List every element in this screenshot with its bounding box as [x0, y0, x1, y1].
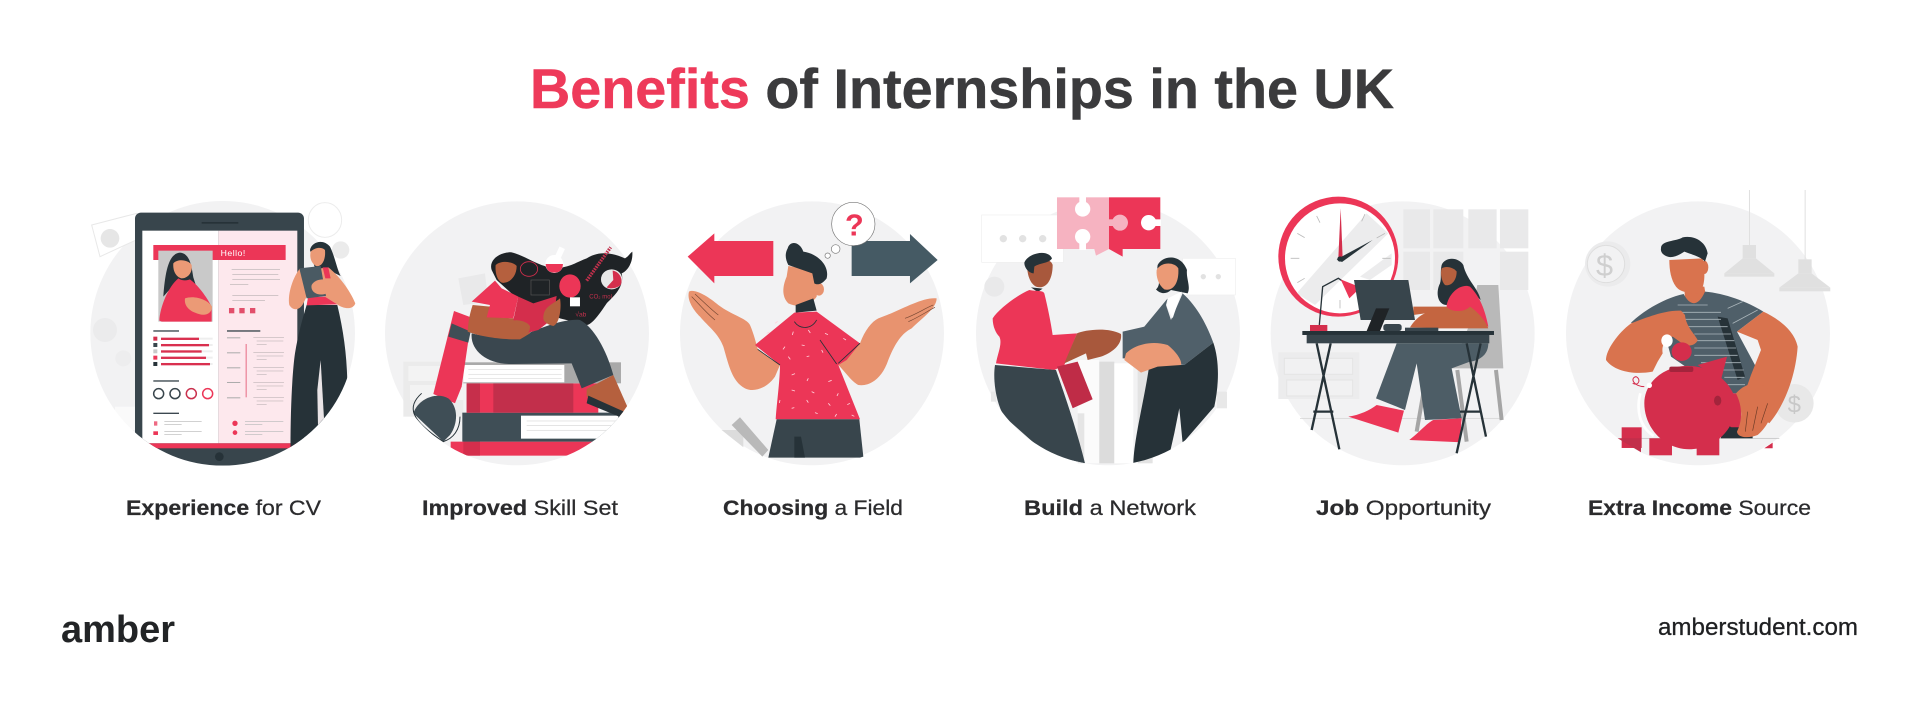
panel: extra income source — [1566, 190, 1830, 520]
pendant lamps — [1724, 190, 1830, 291]
resume header: Hello! — [221, 248, 246, 258]
right arrow — [852, 234, 938, 283]
infographic canvas — [62, 67, 1857, 642]
hand on piggy — [1736, 384, 1774, 437]
woman in grey jacket — [1123, 257, 1218, 463]
desk — [1302, 331, 1494, 453]
desk lamp — [1310, 278, 1361, 331]
wall clock — [1278, 197, 1398, 317]
skill bars — [153, 330, 213, 366]
timeline — [227, 330, 284, 405]
dollar coin left — [1585, 241, 1630, 287]
cabinet — [1278, 352, 1359, 399]
dollar coin right — [1775, 384, 1814, 423]
label: experience for CV: Experience for CV — [126, 497, 321, 520]
dollar coin right: $ — [1788, 392, 1801, 419]
man in red hoodie — [993, 253, 1121, 463]
science doodles: CO₂ mol — [589, 294, 612, 300]
label: improved skill set: Improved Skill Set — [422, 497, 618, 520]
label: extra income source: Extra Income Source — [1588, 497, 1811, 520]
contact rows — [153, 413, 283, 435]
panel: improved skill set — [385, 201, 649, 520]
monitor — [1354, 280, 1438, 331]
dollar coin left: $ — [1596, 249, 1613, 283]
puzzle pieces — [1057, 197, 1161, 257]
panel: choosing a field — [680, 201, 944, 520]
left arrow — [688, 233, 773, 283]
logo: amber: amber — [61, 609, 175, 651]
science doodles — [520, 246, 622, 319]
label: choosing a field: Choosing a Field — [723, 497, 903, 520]
label: job opportunity: Job Opportunity — [1316, 497, 1492, 520]
piggy bank — [1633, 357, 1741, 455]
title: Benefits of Internships in the UK — [530, 57, 1394, 120]
panel: build a network — [976, 197, 1240, 520]
man saving — [1606, 237, 1798, 438]
window — [1403, 209, 1528, 290]
rating circles — [153, 380, 213, 399]
panel: job opportunity — [1271, 197, 1535, 520]
speech bubbles — [982, 215, 1235, 295]
buildings — [1078, 360, 1153, 463]
science doodles: √ab — [575, 311, 587, 319]
label: build a network: Build a Network — [1024, 497, 1197, 520]
floor line and coins — [1618, 427, 1779, 452]
chair — [1417, 285, 1503, 442]
working woman — [1348, 259, 1488, 442]
panel: experience for CV — [90, 201, 355, 520]
thinking man — [689, 243, 937, 458]
website url: amberstudent.com — [1658, 614, 1858, 641]
question bubble — [825, 202, 875, 258]
book stack — [433, 311, 621, 456]
globe — [413, 393, 460, 442]
grey pencil — [722, 417, 768, 457]
resume header — [153, 245, 286, 322]
top text lines and social icons — [229, 269, 280, 313]
woman holding tablet — [289, 242, 355, 467]
reading student — [468, 252, 632, 417]
tablet device — [135, 212, 304, 466]
question bubble: ? — [845, 209, 864, 243]
